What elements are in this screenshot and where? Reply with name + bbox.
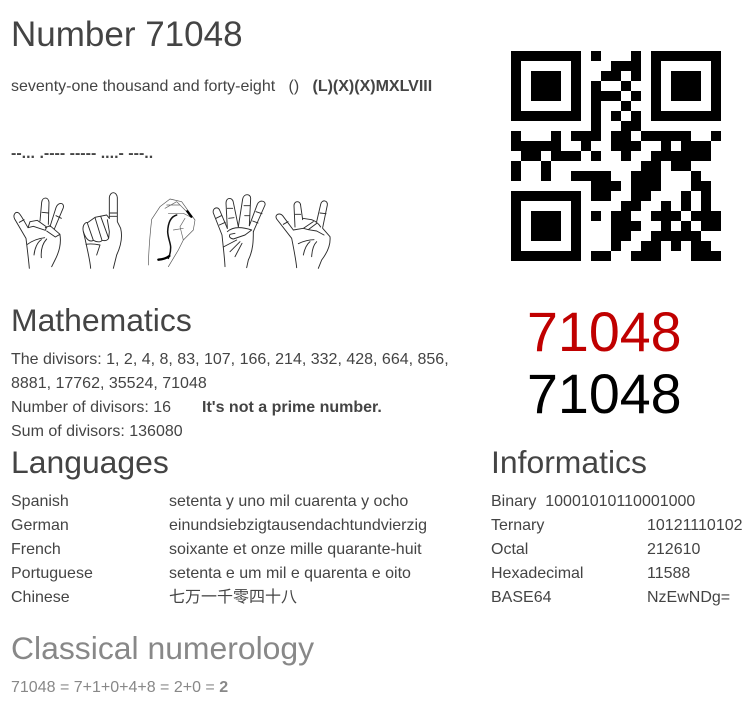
informatics table: Octal [491,541,528,558]
title: Number 71048 [11,15,243,54]
informatics table: Binary 10001010110001000 [491,493,695,510]
informatics table: Hexadecimal [491,565,583,582]
heading: languages: Languages [11,444,169,480]
mathematics text block [11,351,449,440]
languages table: setenta e um mil e quarenta e oito [169,565,411,582]
hand: 1 [83,193,122,268]
informatics table [491,493,743,606]
languages table: setenta y uno mil cuarenta y ocho [169,493,408,510]
languages table: einundsiebzigtausendachtundvierzig [169,517,427,534]
languages table [11,493,427,606]
large black number: 71048 [527,363,682,425]
languages table: Chinese [11,589,70,606]
hand: 7 [14,198,64,268]
languages table: 七万一千零四十八 [169,589,297,606]
hand: 8 [276,201,330,268]
languages table: Portuguese [11,565,93,582]
informatics table: Ternary [491,517,544,534]
mathematics text block: Number of divisors: 16 [11,399,171,416]
informatics table: 10121110102 [647,517,743,534]
heading: mathematics: Mathematics [11,302,192,338]
languages table: French [11,541,61,558]
QR code [511,51,721,261]
hand: 0 [148,199,195,267]
informatics table: NzEwNDg= [647,589,730,606]
languages table: German [11,517,69,534]
mathematics text block: The divisors: 1, 2, 4, 8, 83, 107, 166, 214, 332, 428, 664, 856, [11,351,449,368]
mathematics text block: It's not a prime number. [202,399,382,416]
informatics table: BASE64 [491,589,551,606]
informatics table: 212610 [647,541,700,558]
numerology calculation: 71048 = 7+1+0+4+8 = 2+0 = 2 [11,679,228,696]
heading: informatics: Informatics [491,444,647,480]
number in words and roman numeral: seventy-one thousand and forty-eight () (L)(X)(X)MXLVIII [11,78,432,95]
large red number: 71048 [527,301,682,363]
sign language hands [13,192,331,269]
hand: 4 [213,195,265,268]
mathematics text block: 8881, 17762, 35524, 71048 [11,375,207,392]
heading: classical numerology: Classical numerology [11,630,314,666]
mathematics text block: Sum of divisors: 136080 [11,423,183,440]
morse code: --... .---- ----- ....- ---.. [11,145,153,162]
informatics table: 11588 [647,565,690,582]
languages table: Spanish [11,493,69,510]
languages table: soixante et onze mille quarante-huit [169,541,422,558]
